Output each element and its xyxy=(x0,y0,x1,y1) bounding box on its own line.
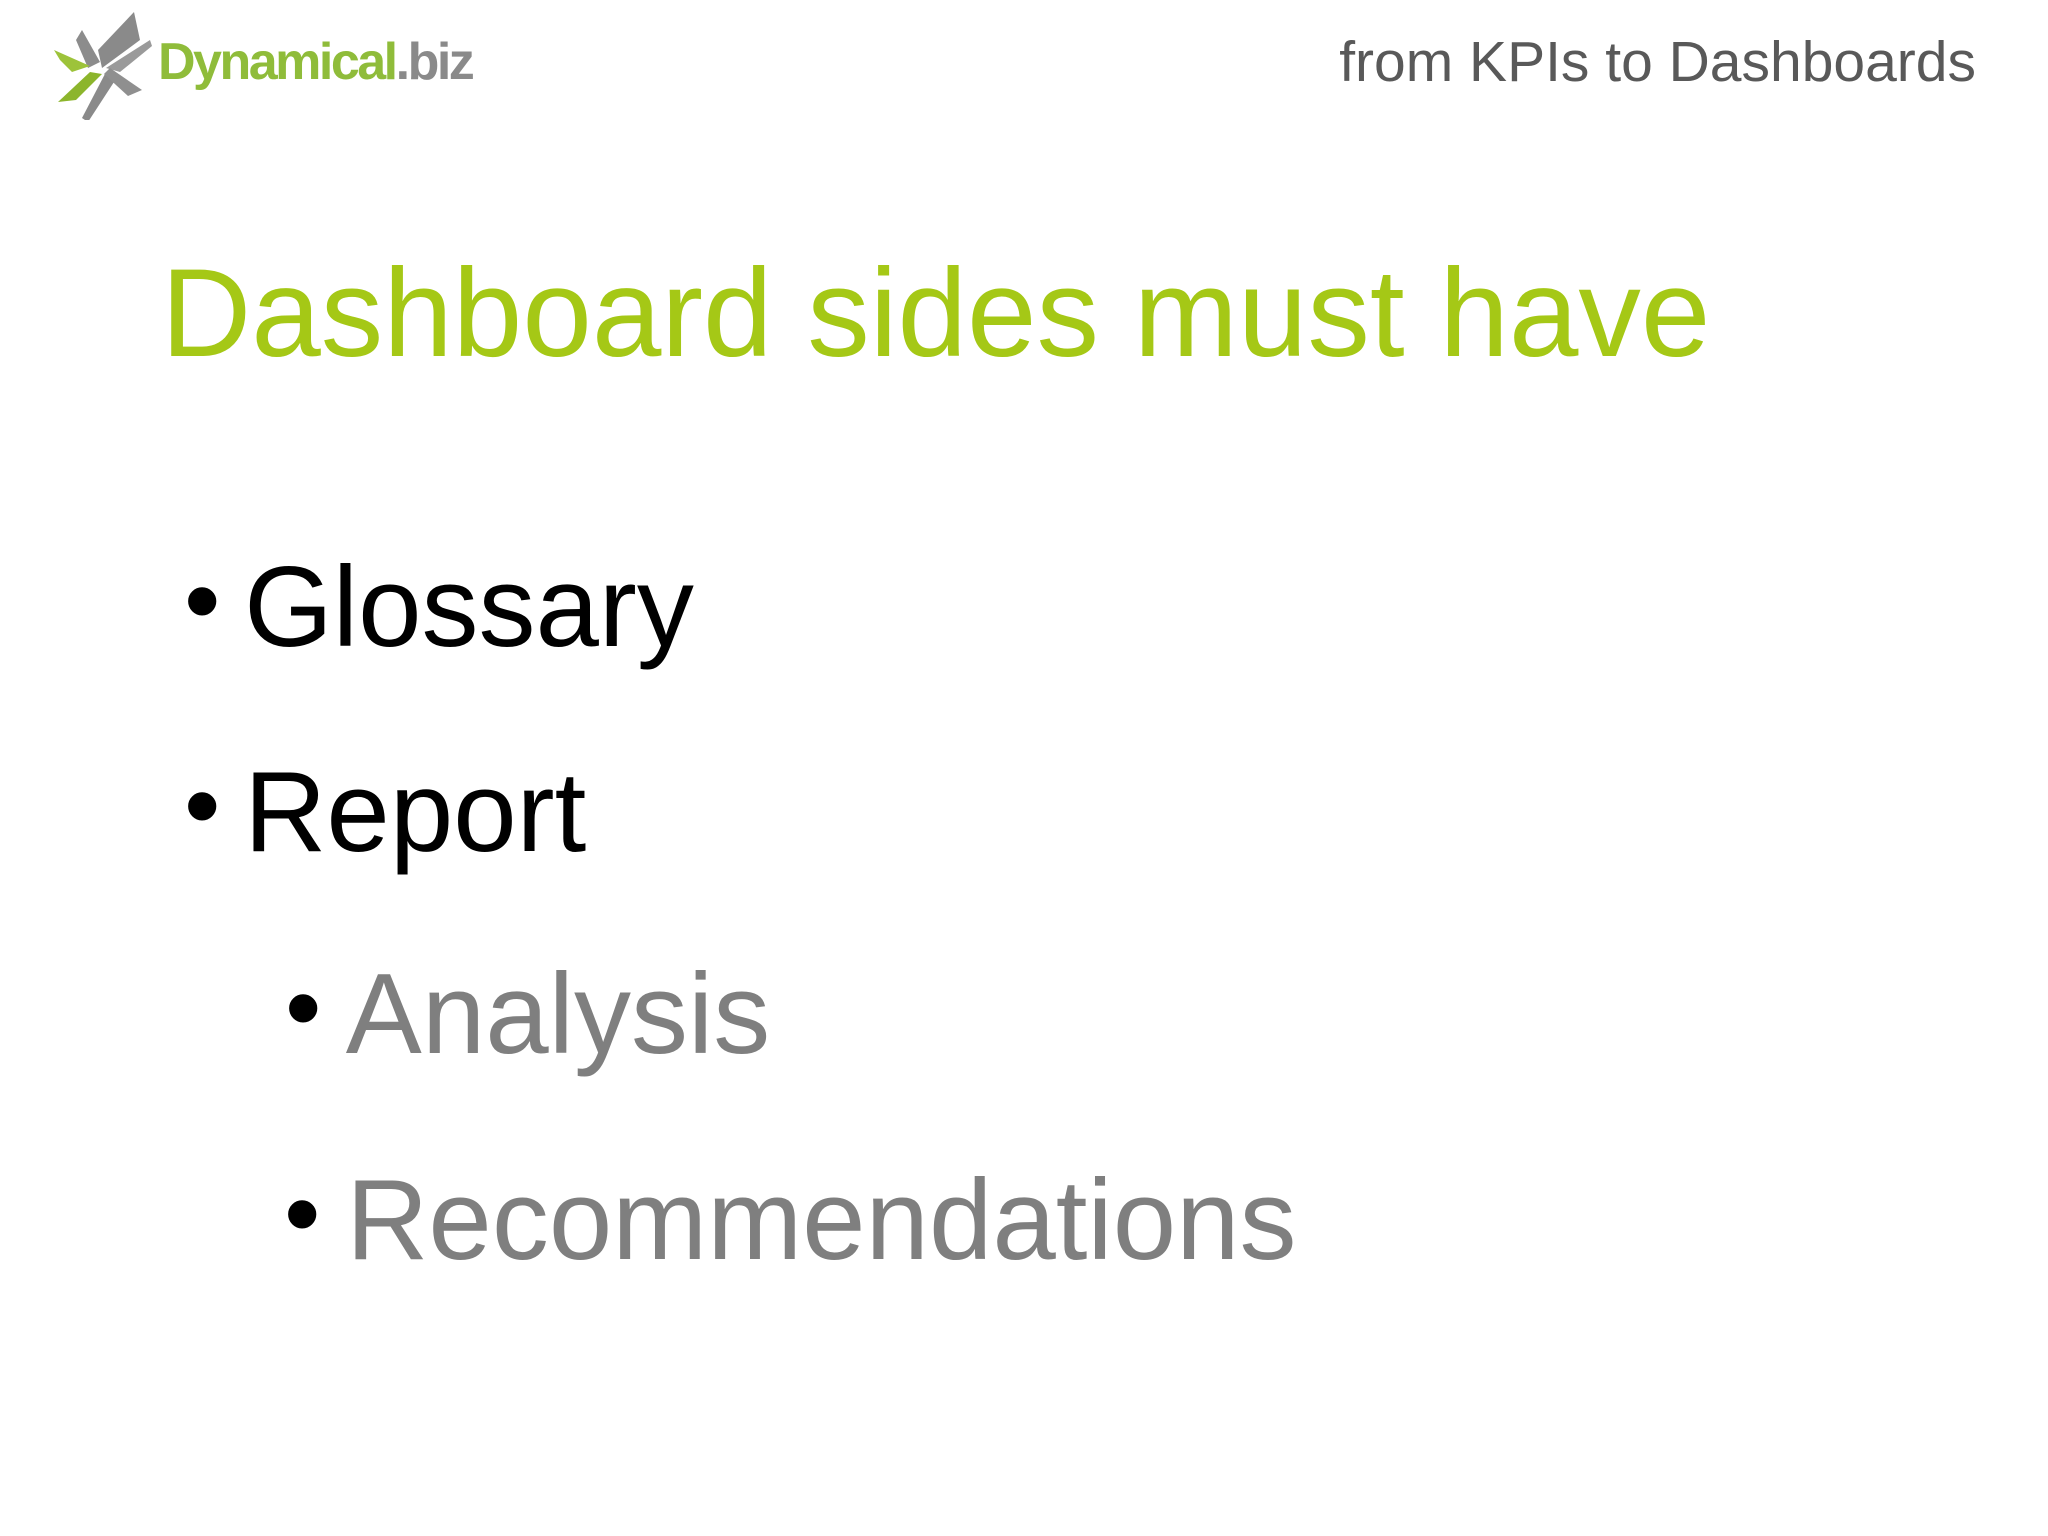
icon: logo mark xyxy=(54,12,152,120)
bullet: Glossary: • Glossary xyxy=(184,543,694,671)
logo xyxy=(54,12,473,120)
bullet: Report: • Report xyxy=(184,748,586,876)
logo text: Dynamical.biz xyxy=(158,33,472,91)
title: Dashboard sides must have xyxy=(161,244,1710,383)
header: subtitle: from KPIs to Dashboards xyxy=(1339,30,1976,94)
sub-bullet: Recommendations: • Recommendations xyxy=(284,1156,1297,1284)
bullet list xyxy=(184,543,1297,1284)
sub-bullet: Analysis: • Analysis xyxy=(285,950,770,1078)
